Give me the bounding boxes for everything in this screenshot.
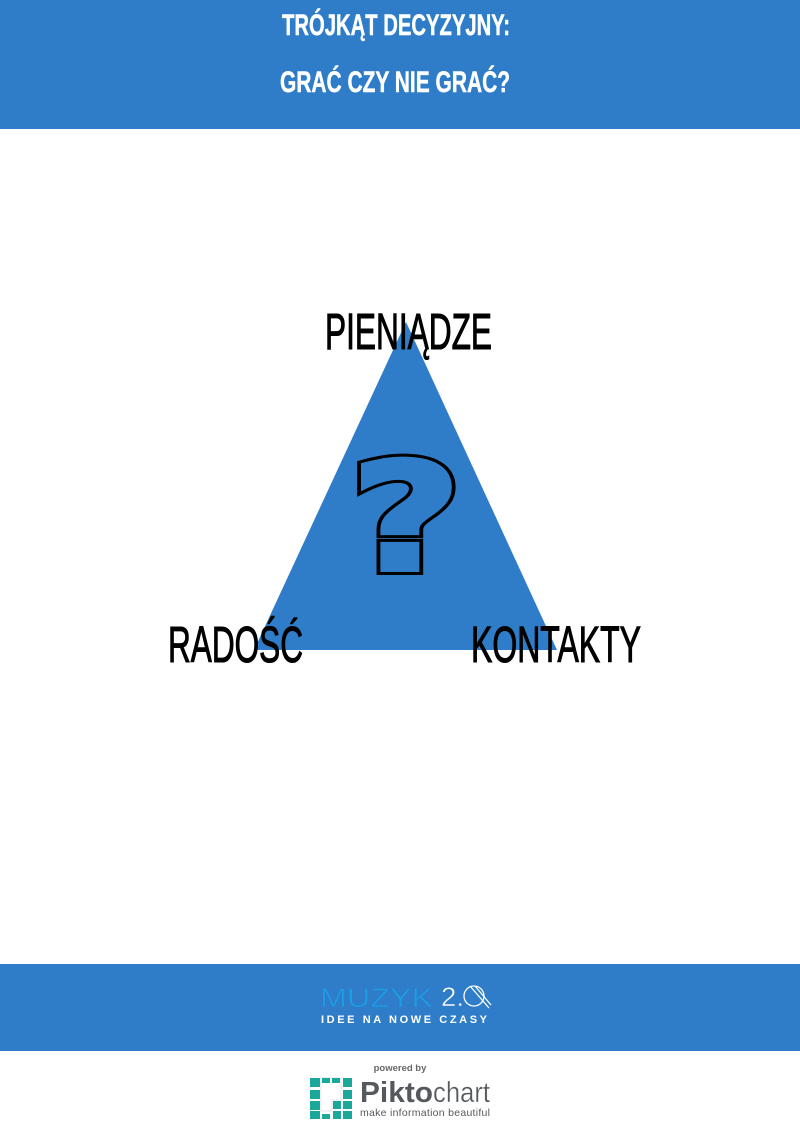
title: TRÓJKĄT DECYZYJNY:	[282, 8, 510, 42]
title: GRAĆ CZY NIE GRAĆ?	[280, 65, 510, 99]
icon: question mark: ?	[350, 431, 462, 606]
footer band	[0, 964, 800, 1051]
logo: Muzyk 2.0: MUZYK	[320, 983, 433, 1013]
logo: Muzyk 2.0	[320, 982, 491, 1026]
header band	[0, 0, 800, 129]
label: money: PIENIĄDZE	[325, 303, 492, 360]
decision triangle	[254, 322, 557, 650]
title	[280, 8, 510, 99]
logo: Muzyk 2.0: 2.	[441, 982, 464, 1012]
logo: Muzyk 2.0: IDEE NA NOWE CZASY	[321, 1014, 488, 1026]
powered by: powered by	[374, 1063, 427, 1074]
logo: Piktochart wordmark: chart	[433, 1077, 490, 1109]
label: joy: RADOŚĆ	[168, 615, 303, 673]
label: contacts: KONTAKTY	[471, 616, 641, 673]
logo: Piktochart wordmark: make information beautiful	[360, 1107, 490, 1119]
logo: Piktochart wordmark: Pikto	[360, 1077, 433, 1109]
logo: Piktochart wordmark	[360, 1077, 490, 1119]
logo: Piktochart icon	[310, 1078, 352, 1119]
icon: question mark: ?	[350, 431, 462, 606]
